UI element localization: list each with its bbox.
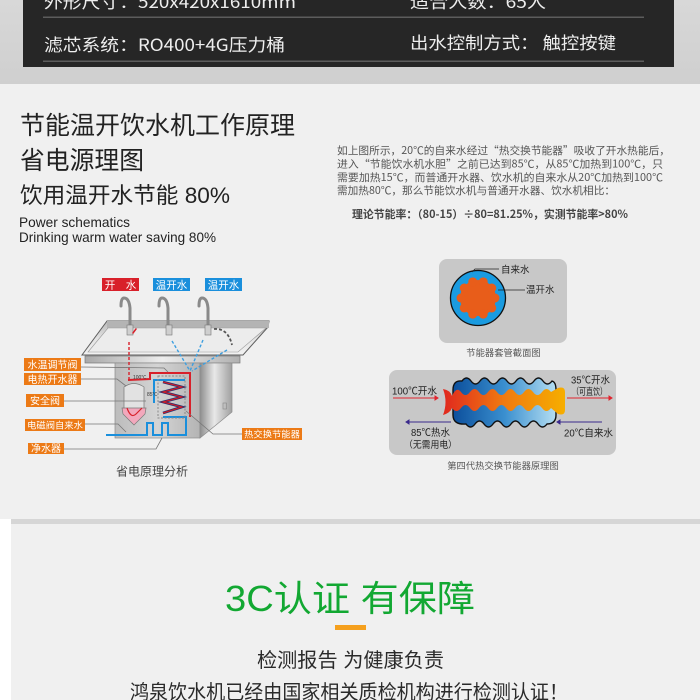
- title line 1: 节能温开饮水机工作原理: [20, 112, 295, 140]
- label: 35C: 35℃开水: [571, 374, 610, 386]
- label: tap water: 自来水: [501, 264, 530, 276]
- panel: specifications: [23, 0, 674, 67]
- arrow: boiling water in: [393, 396, 438, 400]
- temperature marks: 100℃: [133, 375, 146, 381]
- water tank: [122, 384, 146, 425]
- label: no power: （无需用电）: [404, 439, 457, 451]
- panel: heat exchanger principle: [389, 370, 616, 455]
- flow arrows: water out: [129, 329, 232, 380]
- label: electric boiler: 电热开水器: [28, 373, 78, 386]
- top band background: [0, 0, 700, 84]
- icon: tube cross-section: [450, 270, 506, 326]
- title line 2: 省电源理图: [20, 147, 144, 175]
- spec: water control: 出水控制方式： 触控按键: [410, 29, 616, 54]
- label: drinkable: （可直饮）: [572, 386, 607, 398]
- label: purifier: 净水器: [31, 442, 61, 455]
- text block: explanation: 需加热80℃，那么节能饮水机与普通开水器、饮水机相比：: [337, 183, 615, 198]
- label: safety valve: [26, 394, 64, 407]
- panel: cross-section: [439, 259, 567, 343]
- label: 100C: 100℃开水: [392, 386, 437, 398]
- section divider: [0, 519, 700, 700]
- caption: cross-section: 节能器套管截面图: [466, 347, 541, 358]
- arrow: tap water in: [557, 420, 602, 424]
- caption: heat exchanger principle: 第四代热交换节能器原理图: [447, 460, 559, 471]
- sink counter: [82, 321, 269, 363]
- label: temperature valve: 水温调节阀: [28, 358, 78, 371]
- exchanger tube: water jacket: [453, 378, 556, 427]
- hot and cold pipes: [106, 373, 190, 435]
- text block: explanation: 需要加热15℃，而普通开水器、饮水机的自来水从20℃加热到100℃: [337, 170, 664, 185]
- accent bar: [335, 625, 366, 630]
- label: heat exchanger: 热交换节能器: [244, 429, 301, 440]
- english line 2: Drinking warm water saving 80%: [19, 229, 216, 245]
- section: certification: [130, 578, 568, 700]
- arrow: warm water out: [567, 396, 612, 400]
- leader lines: [64, 367, 242, 449]
- heat exchanger: [158, 376, 185, 418]
- label: warm water: 温开水: [526, 284, 555, 296]
- caption: schematic: 省电原理分析: [116, 464, 188, 478]
- spec: filter system: 滤芯系统：RO400+4G压力桶: [44, 31, 285, 56]
- callout: saving rate: 理论节能率：（80-15）÷80=81.25%，实测节能率>80%: [352, 206, 628, 222]
- exchanger tube: hot core: [443, 388, 565, 415]
- subheading: 检测报告 为健康负责: [257, 649, 444, 672]
- heading: 3C认证 有保障: [225, 578, 475, 619]
- label: warm water 1: 温开水: [156, 280, 188, 292]
- heading block: [19, 112, 295, 245]
- label: 20C: 20℃自来水: [564, 426, 613, 440]
- temperature marks: 85℃: [147, 392, 158, 398]
- text block: explanation: 如上图所示，20℃的自来水经过“热交换节能器”吸收了开水热能后，: [337, 143, 670, 158]
- label: solenoid valve: 电磁阀自来水: [27, 420, 84, 431]
- diagram: power saving schematic: [24, 278, 302, 478]
- label: safety valve: 安全阀: [30, 394, 60, 407]
- label: warm water 2: 温开水: [208, 280, 240, 292]
- label: 85C: 85℃热水: [411, 426, 450, 439]
- label: boiling water: 开 水: [105, 280, 137, 292]
- english line 1: Power schematics: [19, 214, 130, 230]
- cabinet: [115, 363, 232, 438]
- subtitle: 饮用温开水节能 80%: [20, 183, 230, 208]
- text block: explanation: 进入“节能饮水机水胆”之前已达到85℃，从85℃加热到100℃，只: [337, 156, 663, 172]
- temperature marks: [133, 375, 158, 398]
- faucets: [121, 298, 211, 335]
- arrow: hot water out: [406, 420, 451, 424]
- leader lines: [472, 269, 525, 290]
- text block: explanation: [337, 143, 670, 198]
